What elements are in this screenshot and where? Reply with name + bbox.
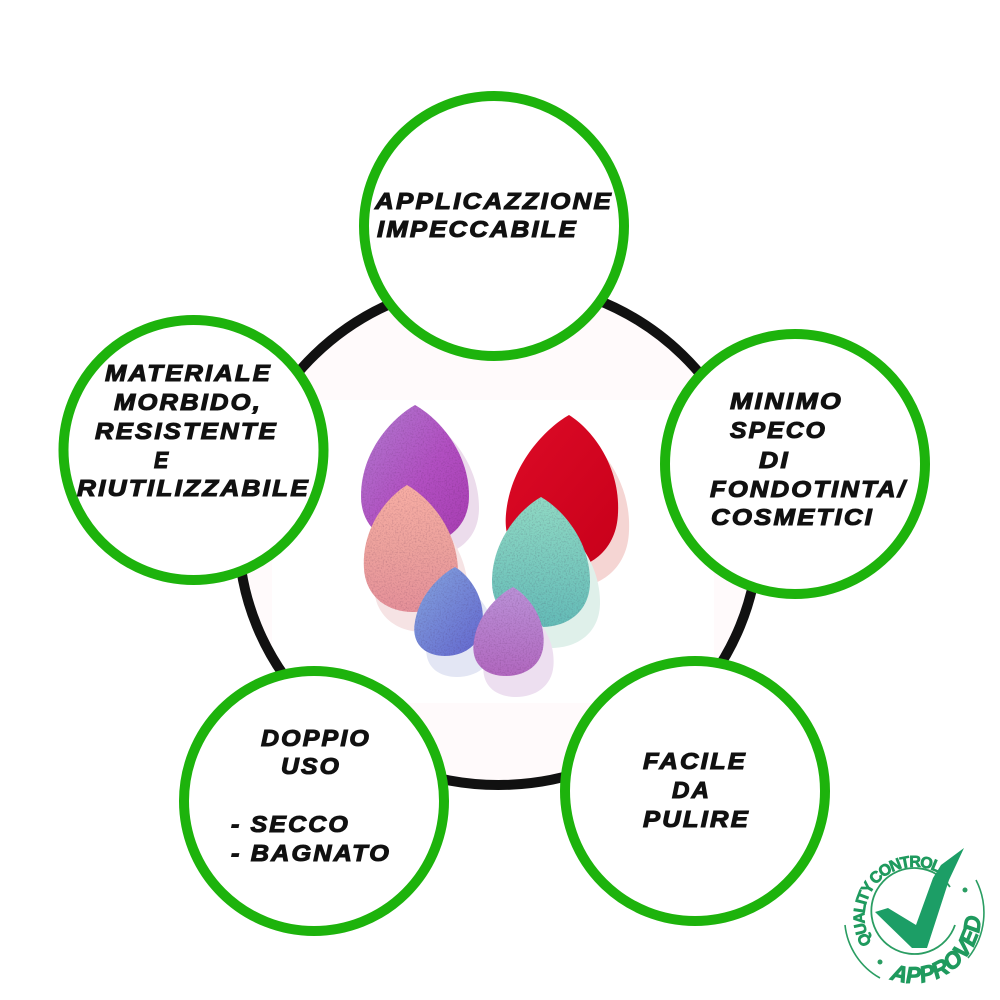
- sponge: red: [502, 415, 636, 588]
- text: materiale: MATERIALE: [105, 360, 272, 386]
- text: materiale: RESISTENTE: [95, 418, 278, 444]
- text: minimo speco: DI: [759, 447, 790, 473]
- text: materiale: MORBIDO,: [114, 389, 262, 415]
- panel: top circle: [364, 96, 624, 356]
- stamp rings: [845, 868, 984, 978]
- central black ring: [238, 281, 758, 785]
- panel: bottom-left circle: [184, 671, 444, 931]
- text: materiale: RIUTILIZZABILE: [77, 475, 310, 501]
- sponge: purple: [361, 405, 479, 557]
- sponge: small lilac: [471, 587, 558, 697]
- sponge: peach: [360, 485, 470, 632]
- text: facile da pulire: PULIRE: [643, 806, 750, 832]
- text: doppio uso: - SECCO: [231, 811, 350, 837]
- text: applicazione: [374, 188, 613, 242]
- panel: left circle: [64, 320, 324, 580]
- text: minimo speco: COSMETICI: [711, 504, 874, 530]
- text: facile da pulire: DA: [672, 777, 711, 803]
- text: facile da pulire: FACILE: [643, 748, 747, 774]
- text: minimo speco: MINIMO: [730, 388, 843, 414]
- stamp text: QUALITY CONTROL: [853, 856, 938, 946]
- text: doppio uso: USO: [281, 753, 341, 779]
- text: facile da pulire: [643, 748, 750, 832]
- stamp dots: [878, 888, 968, 964]
- text: minimo speco: FONDOTINTA/: [710, 476, 908, 502]
- photo: makeup sponges: [272, 400, 714, 703]
- text: applicazione: IMPECCABILE: [377, 216, 578, 242]
- sponge: teal: [492, 497, 600, 648]
- stamp text: APPROVED: [888, 916, 981, 984]
- panel: right circle: [665, 334, 925, 594]
- text: doppio uso: [231, 725, 391, 866]
- central ring interior: [238, 281, 758, 785]
- text: doppio uso: - BAGNATO: [231, 840, 391, 866]
- panel: bottom-right circle: [565, 661, 825, 921]
- sponge: small blue: [411, 567, 501, 677]
- text: minimo speco: SPECO: [730, 417, 827, 443]
- text: applicazione: APPLICAZZIONE: [374, 188, 613, 214]
- stamp text: [853, 856, 981, 984]
- text: doppio uso: DOPPIO: [261, 725, 371, 751]
- stamp: quality control approved: [844, 848, 985, 984]
- icon: check mark: [875, 848, 964, 948]
- text: materiale: [77, 360, 310, 501]
- text: minimo speco: [710, 388, 908, 530]
- text: materiale: E: [154, 447, 170, 473]
